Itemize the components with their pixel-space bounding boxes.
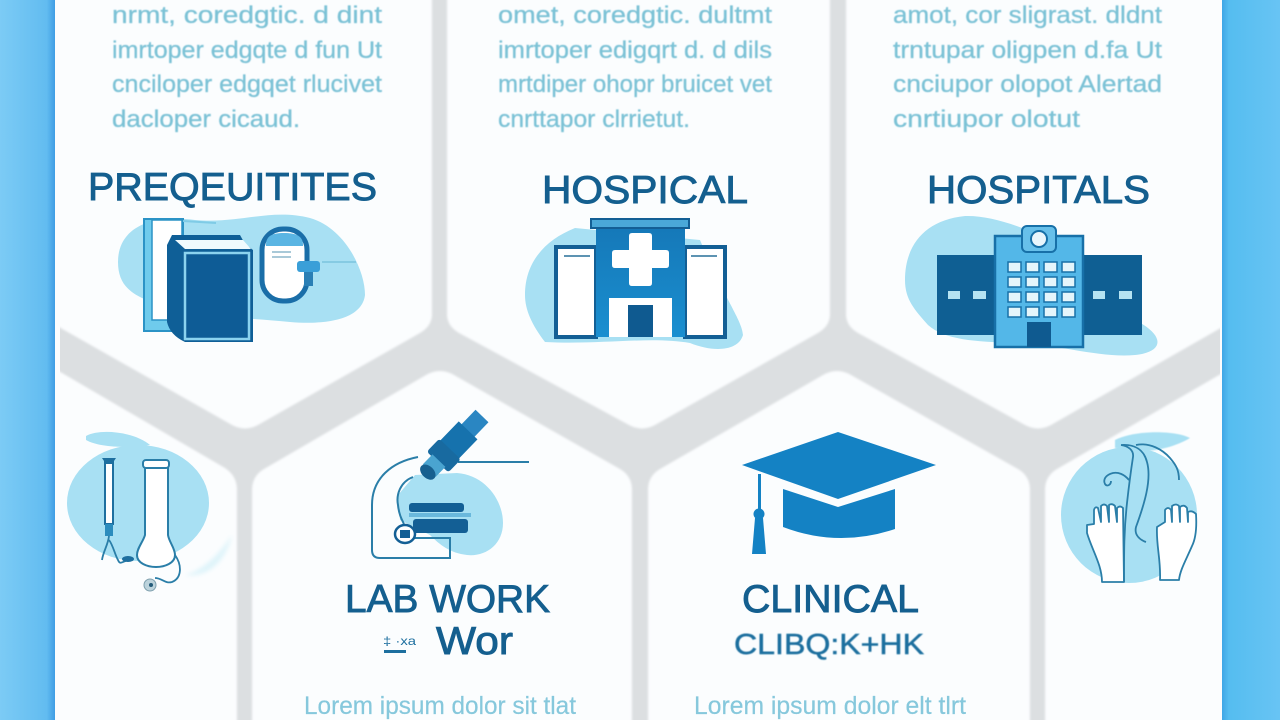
panel: lab work (252, 371, 632, 720)
panel: hospitals (846, 0, 1226, 428)
text block: prerequisites description: dacloper cicaud. (112, 106, 300, 133)
panel: clinical (648, 371, 1030, 720)
icon: hands (1061, 432, 1197, 583)
text block: prerequisites description: imrtoper edgqte d fun Ut (112, 37, 382, 64)
heading: lab work: LAB WORK (345, 578, 550, 621)
panel: prerequisites (50, 0, 432, 428)
text block: hospital description (498, 2, 772, 133)
heading: wor: Wor (436, 620, 513, 663)
heading: wor (383, 620, 513, 663)
text block: prerequisites description: cnciloper edgqet rlucivet (112, 71, 382, 98)
text block: hospital description: imrtoper edigqrt d. d dils (498, 37, 772, 64)
icon: test tube and pipette (67, 432, 232, 591)
text block: hospitals description: cnciupor olopot Alertad (893, 71, 1162, 98)
heading: hospitals: HOSPITALS (927, 169, 1150, 212)
panel: hands (1045, 371, 1226, 720)
text block: hospital description: cnrttapor clrrietut. (498, 106, 690, 133)
icon: hospital tower (905, 216, 1158, 355)
icon: microscope (372, 406, 529, 558)
icon: books and capsule (118, 215, 365, 342)
icon: graduation cap (742, 432, 936, 554)
heading: wor: ‡ ·xa (383, 634, 416, 648)
panel: test tubes (50, 366, 237, 720)
heading: prequeitites: PREQEUITITES (88, 166, 377, 209)
heading: hospical: HOSPICAL (542, 169, 748, 212)
text block: lab work description: Lorem ipsum dolor sit tlat (304, 692, 576, 720)
right blue border (1222, 0, 1280, 720)
text block: clinical description: Lorem ipsum dolor elt tlrt (694, 692, 966, 720)
text block: prerequisites description: nrmt, coredgtic. d dint (112, 2, 382, 29)
heading: clinical: CLINICAL (742, 578, 919, 621)
left blue border (0, 0, 55, 720)
text block: prerequisites description (112, 2, 382, 133)
text block: hospital description: omet, coredgtic. dultmt (498, 2, 772, 29)
icon: hospital building (525, 219, 743, 349)
text block: hospitals description: trntupar oligpen d.fa Ut (893, 37, 1162, 64)
panel: hospital (447, 0, 830, 428)
text block: hospitals description: cnrtiupor olotut (893, 106, 1080, 133)
text block: hospitals description: amot, cor sligrast. dldnt (893, 2, 1162, 29)
subheading: clinical garbled: CLIBQ:K+HK (734, 629, 925, 661)
text block: hospital description: mrtdiper ohopr bruicet vet (498, 71, 772, 98)
text block: hospitals description (893, 2, 1162, 133)
